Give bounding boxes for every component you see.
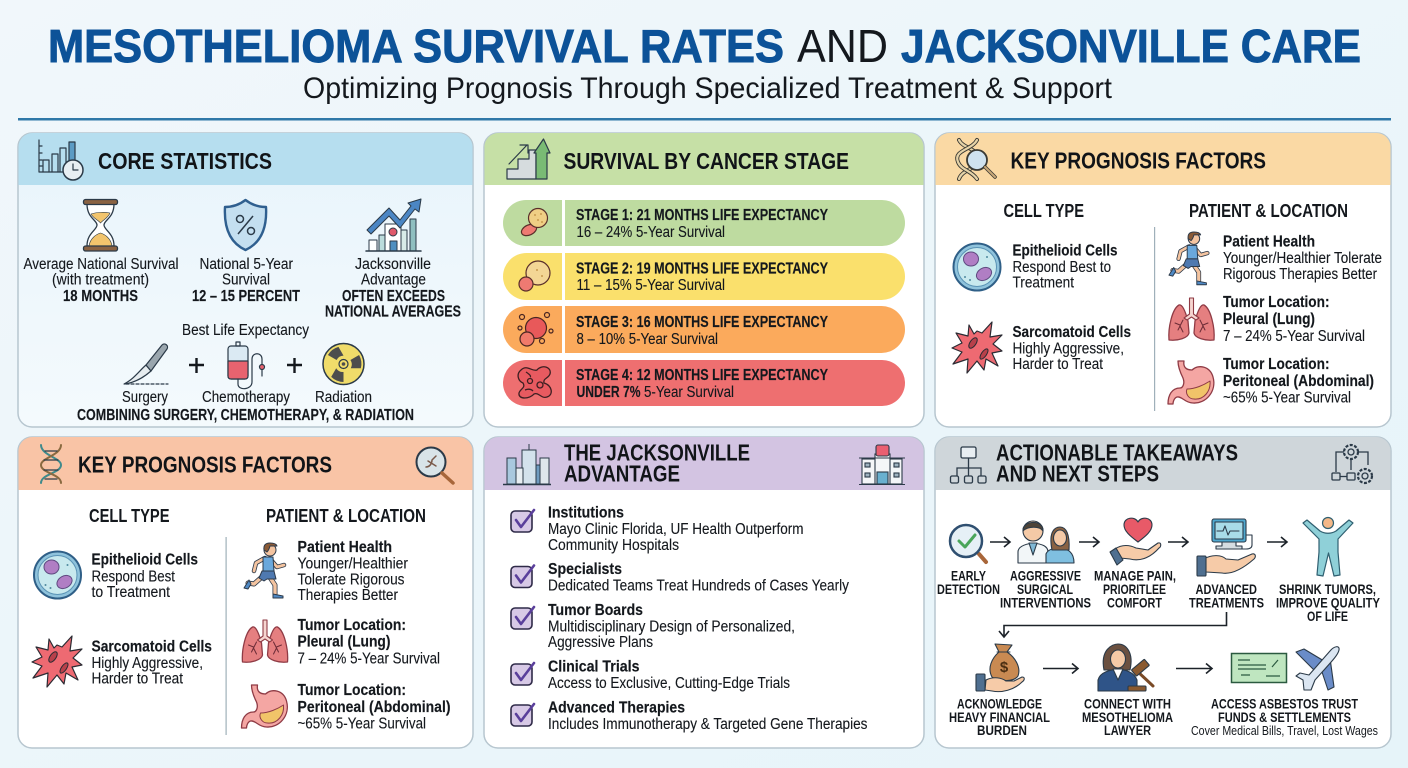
- title: [48, 20, 1361, 72]
- tumor location: pleural: 7 – 24% 5-Year Survival: [1223, 328, 1365, 345]
- epithelioid cells: Treatment: [1012, 275, 1075, 292]
- arrow: [1079, 537, 1099, 547]
- item: tumor boards: [511, 602, 795, 651]
- epithelioid cells: Respond Best: [92, 569, 176, 586]
- patient health: Tolerate Rigorous: [298, 571, 405, 588]
- patient health: Patient Health: [298, 539, 392, 556]
- icon: check: [1232, 654, 1286, 682]
- icon: magnifier: [416, 448, 453, 483]
- heading: ADVANTAGE: [564, 461, 680, 487]
- arrow: [1168, 537, 1188, 547]
- icon: stage 4 cell: [518, 367, 551, 398]
- icon: scalpel: [124, 344, 168, 384]
- column headings: PATIENT & LOCATION: [266, 506, 426, 526]
- arrow: [1176, 664, 1212, 674]
- arrow: [1043, 664, 1078, 674]
- item: institutions: [511, 504, 804, 554]
- sarcomatoid cells: Highly Aggressive,: [92, 655, 203, 672]
- heading: ACTIONABLE TAKEAWAYS: [996, 440, 1238, 466]
- step: manage pain: [1094, 518, 1176, 611]
- icon: DNA with magnifier: [957, 140, 995, 179]
- tumor location: peritoneal: ~65% 5-Year Survival: [298, 716, 426, 733]
- step: connect with lawyer: MESOTHELIOMA: [1082, 709, 1173, 725]
- heading: AND NEXT STEPS: [996, 461, 1159, 487]
- icon: airplane: [1296, 647, 1339, 690]
- patient health: Rigorous Therapies Better: [1223, 266, 1377, 283]
- stat: jacksonville advantage: NATIONAL AVERAGES: [325, 304, 461, 320]
- tumor location: pleural: 7 – 24% 5-Year Survival: [298, 651, 440, 668]
- column headings: PATIENT & LOCATION: [1189, 201, 1348, 221]
- text: best life expectancy: Best Life Expectancy: [182, 322, 309, 339]
- sarcomatoid cells: Harder to Treat: [1012, 356, 1104, 373]
- stat: national 5-year survival: [192, 200, 300, 305]
- epithelioid cells: [954, 243, 1118, 292]
- stat: average national survival: (with treatment): [52, 272, 149, 288]
- icon: DNA: [41, 445, 61, 483]
- step: manage pain: PRIORITLEE: [1103, 581, 1166, 597]
- step: acknowledge financial burden: BURDEN: [977, 722, 1027, 738]
- patient health: Younger/Healthier: [298, 556, 408, 573]
- step: access trust funds: FUNDS & SETTLEMENTS: [1218, 709, 1351, 725]
- heading: THE JACKSONVILLE: [564, 440, 750, 466]
- item: tumor boards: Tumor Boards: [548, 602, 643, 619]
- stat: national 5-year survival: Survival: [222, 272, 270, 288]
- item: tumor boards: Aggressive Plans: [548, 634, 653, 651]
- item: institutions: Mayo Clinic Florida, UF Health Outperform: [548, 521, 804, 538]
- icon: chemotherapy IV bag: [228, 342, 264, 389]
- icon: stage 3 cell: [518, 312, 553, 346]
- stage 4 row: UNDER 7%: [576, 384, 641, 401]
- step: early detection: DETECTION: [937, 581, 1000, 597]
- arrow: [990, 537, 1010, 547]
- step: acknowledge financial burden: HEAVY FINANCIAL: [949, 709, 1050, 725]
- stat: jacksonville advantage: Advantage: [361, 272, 426, 288]
- item: specialists: Specialists: [548, 561, 622, 578]
- epithelioid cells: Epithelioid Cells: [92, 552, 198, 569]
- patient health: Younger/Healthier Tolerate: [1223, 250, 1382, 267]
- stat: average national survival: [24, 200, 178, 305]
- column headings: CELL TYPE: [89, 506, 170, 526]
- step: aggressive surgical interventions: SURGICAL: [1017, 581, 1073, 597]
- icon: bar chart with clock: [39, 140, 83, 180]
- item: tumor boards: Multidisciplinary Design of Personalized,: [548, 619, 795, 636]
- icon: hospital: [859, 445, 905, 484]
- panel: survival by cancer stage: [484, 133, 924, 427]
- step: manage pain: MANAGE PAIN,: [1094, 568, 1176, 584]
- tumor location: peritoneal: [242, 682, 450, 733]
- stage 1 row: 16 – 24% 5-Year Survival: [576, 224, 725, 241]
- step: acknowledge financial burden: ACKNOWLEDGE: [957, 696, 1042, 712]
- step: shrink tumors: [1276, 518, 1381, 624]
- icon: flow chart: [950, 447, 986, 483]
- treatment labels: [122, 389, 372, 406]
- step: advanced treatments: TREATMENTS: [1189, 595, 1264, 611]
- item: advanced therapies: [511, 699, 868, 733]
- step: shrink tumors: OF LIFE: [1307, 608, 1348, 624]
- treatment labels: Chemotherapy: [202, 389, 290, 406]
- item: advanced therapies: Includes Immunotherapy & Targeted Gene Therapies: [548, 716, 868, 733]
- heading: SURVIVAL BY CANCER STAGE: [564, 148, 849, 174]
- arrow: [1267, 537, 1287, 547]
- step: shrink tumors: SHRINK TUMORS,: [1279, 581, 1376, 597]
- epithelioid cells: Epithelioid Cells: [1012, 243, 1118, 260]
- column headings: [1004, 201, 1348, 221]
- icon: stage 1 cell: [520, 208, 548, 238]
- stat: jacksonville advantage: Jacksonville: [355, 256, 431, 273]
- step: acknowledge financial burden: [949, 644, 1050, 738]
- icon: money bag in hand: [976, 644, 1024, 692]
- panel: core statistics: [18, 133, 473, 427]
- stat: national 5-year survival: 12 – 15 PERCENT: [192, 288, 300, 305]
- icon: raised-arms person: [1303, 518, 1353, 576]
- tumor location: peritoneal: Peritoneal (Abdominal): [298, 699, 450, 716]
- step: manage pain: COMFORT: [1107, 595, 1162, 611]
- epithelioid cells: [34, 552, 198, 601]
- step: early detection: [937, 525, 1000, 597]
- patient health: [1169, 232, 1382, 285]
- item: clinical trials: [511, 658, 790, 692]
- stage 3 row: STAGE 3: 16 MONTHS LIFE EXPECTANCY: [576, 314, 829, 331]
- patient health: Patient Health: [1223, 233, 1315, 250]
- tumor location: peritoneal: ~65% 5-Year Survival: [1223, 390, 1351, 407]
- stat: jacksonville advantage: [325, 199, 461, 320]
- heading: CORE STATISTICS: [98, 148, 272, 174]
- tumor location: pleural: [242, 617, 440, 668]
- icon: heart over hand: [1110, 518, 1161, 565]
- stat: national 5-year survival: National 5-Year: [200, 256, 293, 273]
- sarcomatoid cells: Harder to Treat: [92, 670, 184, 687]
- step: access trust funds: [1191, 647, 1378, 738]
- heading: KEY PROGNOSIS FACTORS: [1010, 148, 1266, 174]
- epithelioid cells: to Treatment: [92, 584, 171, 601]
- column headings: [89, 506, 426, 526]
- item: clinical trials: Clinical Trials: [548, 658, 640, 675]
- stage 3 row: [503, 305, 905, 354]
- title: AND: [797, 20, 888, 72]
- item: specialists: [511, 561, 849, 595]
- item: institutions: Institutions: [548, 504, 624, 521]
- tumor location: pleural: Tumor Location:: [298, 617, 406, 634]
- step: shrink tumors: IMPROVE QUALITY: [1276, 595, 1381, 611]
- arrow: elbow to second row: [999, 612, 1226, 637]
- heading: [564, 440, 750, 487]
- step: aggressive surgical interventions: AGGRESSIVE: [1010, 568, 1081, 584]
- sarcomatoid cells: Sarcomatoid Cells: [92, 638, 212, 655]
- item: institutions: Community Hospitals: [548, 537, 679, 554]
- icon: radiation: [323, 344, 365, 384]
- item: advanced therapies: Advanced Therapies: [548, 699, 685, 716]
- item: clinical trials: Access to Exclusive, Cutting-Edge Trials: [548, 675, 790, 692]
- icon: process gears: [1332, 445, 1372, 483]
- step: connect with lawyer: [1082, 644, 1173, 738]
- tumor location: pleural: Pleural (Lung): [298, 634, 390, 651]
- icon: stairs with arrow: [507, 139, 550, 179]
- step: advanced treatments: [1189, 519, 1264, 611]
- stage 4 row: [503, 359, 905, 407]
- stage 2 row: [503, 252, 905, 301]
- patient health: [244, 539, 408, 604]
- tumor location: peritoneal: [1168, 356, 1374, 407]
- sarcomatoid cells: [32, 636, 212, 687]
- step: aggressive surgical interventions: INTERVENTIONS: [1000, 595, 1091, 611]
- icon: plus: [287, 358, 302, 373]
- stage 4 row: STAGE 4: 12 MONTHS LIFE EXPECTANCY: [576, 367, 829, 384]
- sarcomatoid cells: Sarcomatoid Cells: [1012, 324, 1131, 341]
- title: JACKSONVILLE CARE: [901, 20, 1361, 72]
- heading: KEY PROGNOSIS FACTORS: [78, 451, 332, 477]
- step: acknowledge financial burden: $: [1000, 659, 1009, 676]
- stage 2 row: 11 – 15% 5-Year Survival: [576, 277, 725, 294]
- stat: average national survival: Average National Survival: [24, 256, 178, 273]
- panel: the jacksonville advantage: [484, 437, 924, 748]
- tumor location: pleural: Pleural (Lung): [1223, 311, 1315, 328]
- tumor location: peritoneal: Tumor Location:: [298, 682, 406, 699]
- stat: jacksonville advantage: OFTEN EXCEEDS: [342, 288, 445, 305]
- sarcomatoid cells: [952, 322, 1131, 373]
- text: combining treatments: COMBINING SURGERY, CHEMOTHERAPY, & RADIATION: [77, 407, 414, 424]
- sarcomatoid cells: Highly Aggressive,: [1012, 341, 1124, 358]
- tumor location: pleural: Tumor Location:: [1223, 294, 1330, 311]
- tumor location: pleural: [1169, 294, 1365, 345]
- panel: actionable takeaways: [935, 437, 1391, 748]
- epithelioid cells: Respond Best to: [1012, 259, 1111, 276]
- icon: city skyline: [503, 444, 551, 484]
- icon: plus: [189, 358, 204, 373]
- icon: doctor and patient: [1018, 521, 1074, 563]
- step: early detection: EARLY: [951, 568, 986, 584]
- stat: average national survival: 18 MONTHS: [63, 288, 138, 305]
- heading: [996, 440, 1238, 487]
- stage 1 row: STAGE 1: 21 MONTHS LIFE EXPECTANCY: [576, 207, 829, 224]
- step: access trust funds: Cover Medical Bills, Travel, Lost Wages: [1191, 724, 1378, 738]
- subtitle: Optimizing Prognosis Through Specialized Treatment & Support: [303, 72, 1112, 105]
- stage 4 row: 5-Year Survival: [644, 384, 734, 401]
- panel: key prognosis factors (bottom left): [18, 437, 473, 748]
- tumor location: peritoneal: Tumor Location:: [1223, 356, 1330, 373]
- step: advanced treatments: ADVANCED: [1196, 581, 1257, 597]
- icon: monitor over hand: [1197, 519, 1255, 576]
- stage 1 row: [503, 199, 905, 247]
- treatment labels: Surgery: [122, 389, 168, 406]
- icon: lawyer with gavel: [1098, 644, 1153, 691]
- treatment labels: Radiation: [315, 389, 372, 406]
- step: aggressive surgical interventions: [1000, 521, 1091, 611]
- patient health: Therapies Better: [298, 587, 398, 604]
- step: connect with lawyer: CONNECT WITH: [1084, 696, 1171, 712]
- column headings: CELL TYPE: [1004, 201, 1084, 221]
- stage 2 row: STAGE 2: 19 MONTHS LIFE EXPECTANCY: [576, 260, 829, 277]
- stage 3 row: 8 – 10% 5-Year Survival: [576, 331, 718, 348]
- panel: key prognosis factors (top right): [935, 133, 1391, 427]
- icon: magnifier with check: [950, 525, 986, 562]
- item: specialists: Dedicated Teams Treat Hundreds of Cases Yearly: [548, 578, 849, 595]
- tumor location: peritoneal: Peritoneal (Abdominal): [1223, 373, 1374, 390]
- title: MESOTHELIOMA SURVIVAL RATES: [48, 20, 784, 72]
- step: connect with lawyer: LAWYER: [1104, 722, 1151, 738]
- step: access trust funds: ACCESS ASBESTOS TRUST: [1211, 696, 1358, 712]
- icon: stage 2 cell: [519, 261, 550, 291]
